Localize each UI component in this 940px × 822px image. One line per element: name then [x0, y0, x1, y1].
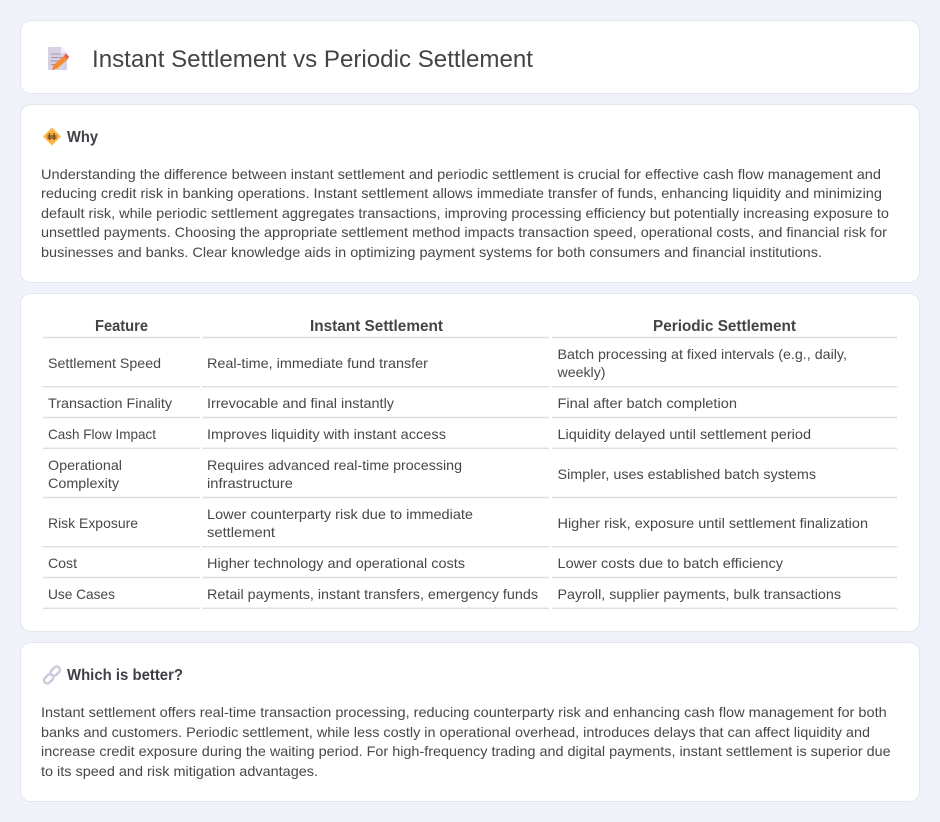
row: operational complexity: infrastructure — [207, 475, 293, 491]
panel: comparison table — [20, 294, 920, 632]
row: cash flow impact: Cash Flow Impact — [48, 426, 156, 442]
text block: why paragraph: businesses and banks. Clear knowledge aids in optimizing payment systems for both consumers and financial institutions. — [41, 244, 822, 260]
row: settlement speed: weekly) — [556, 364, 606, 380]
row: risk exposure — [48, 506, 868, 540]
text block: why paragraph: unsettled payments. Choosing the appropriate settlement method impacts transaction speed, operational costs, and financial risk for — [41, 224, 887, 240]
row: risk exposure: Higher risk, exposure until settlement finalization — [558, 515, 868, 531]
panel: why — [20, 104, 920, 282]
panel: which is better — [20, 642, 920, 802]
text block: which is better paragraph — [41, 704, 891, 779]
text block: which is better paragraph: increase credit exposure during the waiting period. For high-frequency trading and digital payments, instant settlement is superior due — [41, 743, 891, 759]
table header row: Feature — [95, 318, 148, 335]
icon: memo with pencil — [48, 47, 69, 70]
text block: why paragraph: reducing credit risk in banking operations. Instant settlement allows immediate transfer of funds, enhancing liquidity and minimizing — [41, 185, 882, 201]
row: risk exposure: Risk Exposure — [48, 515, 138, 531]
row: cost — [48, 555, 783, 571]
title: Instant Settlement vs Periodic Settlement — [92, 46, 533, 73]
text block: which is better paragraph: Instant settlement offers real-time transaction processing, reducing counterparty risk and enhancing cash flow management for both — [41, 704, 887, 720]
panel: header — [20, 20, 920, 94]
text block: which is better paragraph: banks and customers. Periodic settlement, while less costly in operational overhead, introduces delays that can affect liquidity and — [41, 724, 870, 740]
row: transaction finality — [48, 395, 737, 411]
row: cash flow impact — [48, 426, 811, 442]
icon: warning diamond — [44, 128, 60, 145]
icon: chain link — [43, 665, 61, 685]
row: cash flow impact: Liquidity delayed until settlement period — [558, 426, 811, 442]
row: use cases: Use Cases — [48, 586, 115, 602]
row: settlement speed: Settlement Speed — [48, 355, 161, 371]
table header row: Periodic Settlement — [653, 318, 797, 335]
row: operational complexity: Complexity — [48, 475, 119, 491]
row: operational complexity: Requires advanced real-time processing — [207, 457, 462, 473]
heading: which is better: Which is better? — [67, 667, 183, 684]
row: cash flow impact: Improves liquidity with instant access — [207, 426, 446, 442]
row: cost: Lower costs due to batch efficiency — [558, 555, 783, 571]
row: use cases — [48, 586, 841, 602]
row: settlement speed: Batch processing at fixed intervals (e.g., daily, — [558, 346, 847, 362]
heading: why: Why — [67, 129, 98, 146]
row: cost: Higher technology and operational costs — [207, 555, 465, 571]
table header row: Instant Settlement — [310, 318, 444, 335]
row: cost: Cost — [48, 555, 77, 571]
row: transaction finality: Final after batch completion — [558, 395, 737, 411]
row: risk exposure: Lower counterparty risk due to immediate — [207, 506, 473, 522]
row: transaction finality: Transaction Finality — [48, 395, 172, 411]
row: use cases: Retail payments, instant transfers, emergency funds — [207, 586, 538, 602]
row: transaction finality: Irrevocable and final instantly — [207, 395, 394, 411]
row: use cases: Payroll, supplier payments, bulk transactions — [558, 586, 841, 602]
text block: why paragraph: default risk, while periodic settlement aggregates transactions, improving processing efficiency but potentially increasing exposure to — [41, 205, 889, 221]
row: risk exposure: settlement — [207, 524, 275, 540]
row: operational complexity: Operational — [48, 457, 122, 473]
text block: which is better paragraph: to its speed and risk mitigation advantages. — [41, 763, 318, 779]
row: settlement speed: Real-time, immediate fund transfer — [207, 355, 428, 371]
row: operational complexity: Simpler, uses established batch systems — [558, 466, 816, 482]
row: operational complexity — [48, 457, 816, 491]
text block: why paragraph — [41, 166, 889, 260]
row: settlement speed — [48, 346, 847, 380]
text block: why paragraph: Understanding the difference between instant settlement and periodic settlement is crucial for effective cash flow management and — [41, 166, 881, 182]
table header row — [95, 318, 797, 335]
